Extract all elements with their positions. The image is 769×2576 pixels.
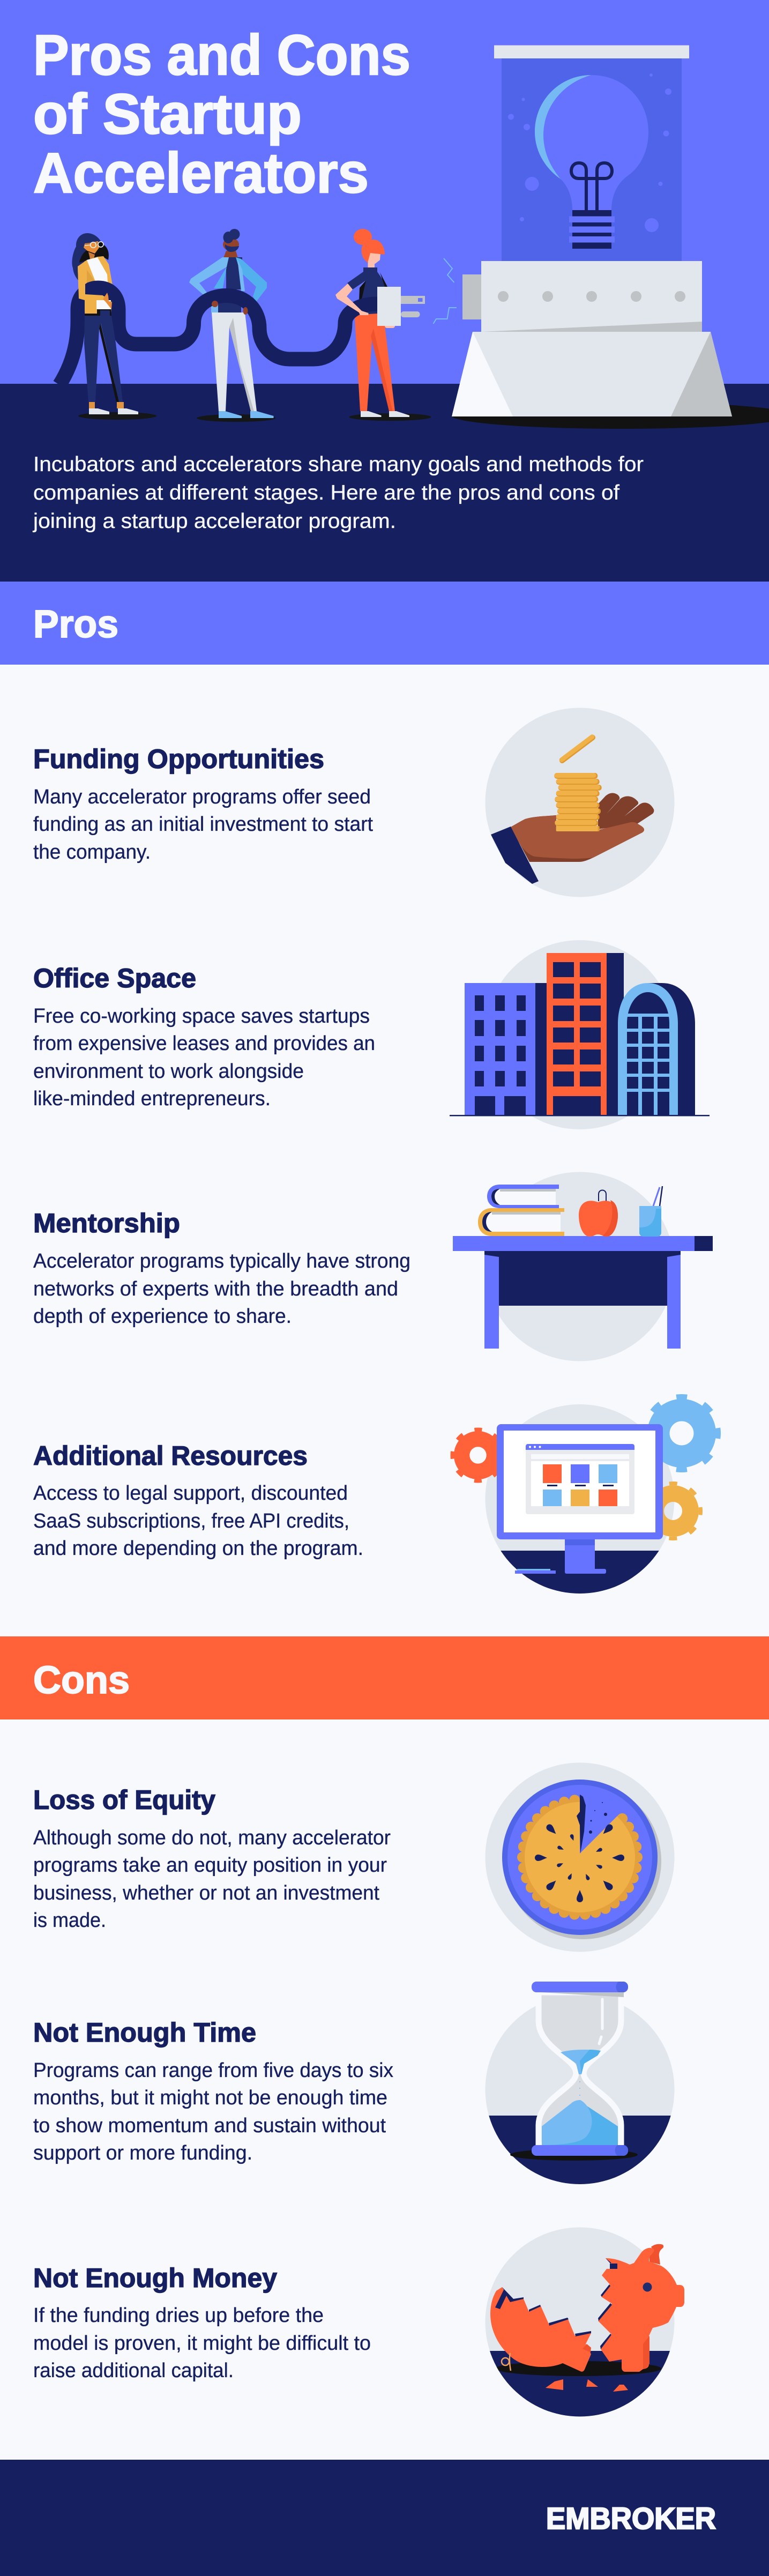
panel: footer bbox=[0, 2460, 769, 2576]
figure: woman with glasses bbox=[72, 233, 156, 420]
text block: funding as an initial investment to start bbox=[33, 813, 373, 836]
panel: additional resources bbox=[33, 1397, 718, 1599]
text block: Although some do not, many accelerator bbox=[33, 1827, 391, 1849]
title: of Startup bbox=[33, 83, 302, 146]
text block bbox=[33, 1827, 391, 1932]
figure: man's hands bbox=[212, 301, 248, 315]
text block: SaaS subscriptions, free API credits, bbox=[33, 1510, 349, 1532]
icon: giant plug held by woman bbox=[335, 284, 425, 328]
icon: broken piggy bank bbox=[482, 2228, 684, 2421]
text block: environment to work alongside bbox=[33, 1060, 304, 1083]
panel: cons header bbox=[0, 1636, 769, 1719]
icon: desk with books, apple and cup bbox=[453, 1172, 713, 1361]
icon: monitor and gears bbox=[452, 1397, 718, 1599]
panel: not enough money bbox=[33, 2228, 684, 2421]
heading: Office Space bbox=[33, 963, 196, 993]
text block: Programs can range from five days to six bbox=[33, 2059, 393, 2082]
intro text: companies at different stages. Here are the pros and cons of bbox=[33, 481, 619, 504]
title: Pros and Cons bbox=[33, 24, 410, 87]
panel: office space bbox=[33, 940, 710, 1129]
text block: If the funding dries up before the bbox=[33, 2304, 324, 2327]
text block: support or more funding. bbox=[33, 2142, 252, 2164]
heading: Additional Resources bbox=[33, 1441, 308, 1471]
intro text: Incubators and accelerators share many goals and methods for bbox=[33, 453, 644, 476]
text block: Many accelerator programs offer seed bbox=[33, 786, 371, 808]
panel: pros header bbox=[0, 582, 769, 665]
intro text bbox=[33, 453, 644, 533]
icon: hourglass bbox=[482, 1982, 677, 2185]
text block: Access to legal support, discounted bbox=[33, 1482, 348, 1505]
heading: Funding Opportunities bbox=[33, 744, 324, 774]
text block: is made. bbox=[33, 1909, 106, 1932]
text block: like-minded entrepreneurs. bbox=[33, 1088, 271, 1110]
text block: Accelerator programs typically have strong bbox=[33, 1250, 410, 1272]
text block: depth of experience to share. bbox=[33, 1305, 292, 1328]
heading: Mentorship bbox=[33, 1208, 180, 1238]
icon: office buildings bbox=[450, 940, 710, 1129]
text block bbox=[33, 1005, 375, 1110]
text block: from expensive leases and provides an bbox=[33, 1032, 375, 1055]
figure: woman with red hair bbox=[347, 229, 431, 421]
panel: pros header: Pros bbox=[33, 603, 118, 646]
panel: loss of equity bbox=[33, 1762, 674, 1952]
figure: man with beard bbox=[189, 229, 275, 422]
text block bbox=[33, 786, 373, 863]
heading: Not Enough Time bbox=[33, 2017, 256, 2048]
icon: hand holding coins bbox=[486, 708, 674, 897]
text block: model is proven, it might be difficult to bbox=[33, 2332, 371, 2355]
icon: light bulb machine bbox=[451, 45, 769, 429]
text block: Free co-working space saves startups bbox=[33, 1005, 370, 1028]
panel: not enough time bbox=[33, 1982, 677, 2185]
text block bbox=[33, 2304, 371, 2382]
heading: Loss of Equity bbox=[33, 1785, 215, 1815]
icon: electric sparks bbox=[433, 258, 457, 324]
title: Accelerators bbox=[33, 142, 369, 205]
panel: cons header: Cons bbox=[33, 1659, 130, 1702]
heading: Not Enough Money bbox=[33, 2263, 277, 2293]
text block: raise additional capital. bbox=[33, 2359, 234, 2382]
icon: pie with missing slice bbox=[486, 1762, 674, 1952]
panel: mentorship bbox=[33, 1172, 713, 1361]
text block: and more depending on the program. bbox=[33, 1537, 363, 1560]
text block bbox=[33, 2059, 393, 2164]
text block: business, whether or not an investment bbox=[33, 1882, 379, 1904]
text block bbox=[33, 1482, 363, 1560]
logo: Embroker: EMBROKER bbox=[546, 2501, 716, 2536]
text block: programs take an equity position in your bbox=[33, 1854, 387, 1877]
text block: the company. bbox=[33, 841, 151, 863]
text block: months, but it might not be enough time bbox=[33, 2087, 387, 2109]
panel: funding opportunities bbox=[33, 708, 674, 897]
title bbox=[33, 24, 410, 205]
text block bbox=[33, 1250, 410, 1328]
text block: networks of experts with the breadth and bbox=[33, 1278, 398, 1300]
icon: power cable bbox=[59, 288, 378, 385]
figure: foreground details of woman with glasses bbox=[78, 263, 138, 414]
panel: hero bbox=[0, 0, 769, 582]
intro text: joining a startup accelerator program. bbox=[33, 510, 396, 533]
text block: to show momentum and sustain without bbox=[33, 2115, 386, 2137]
